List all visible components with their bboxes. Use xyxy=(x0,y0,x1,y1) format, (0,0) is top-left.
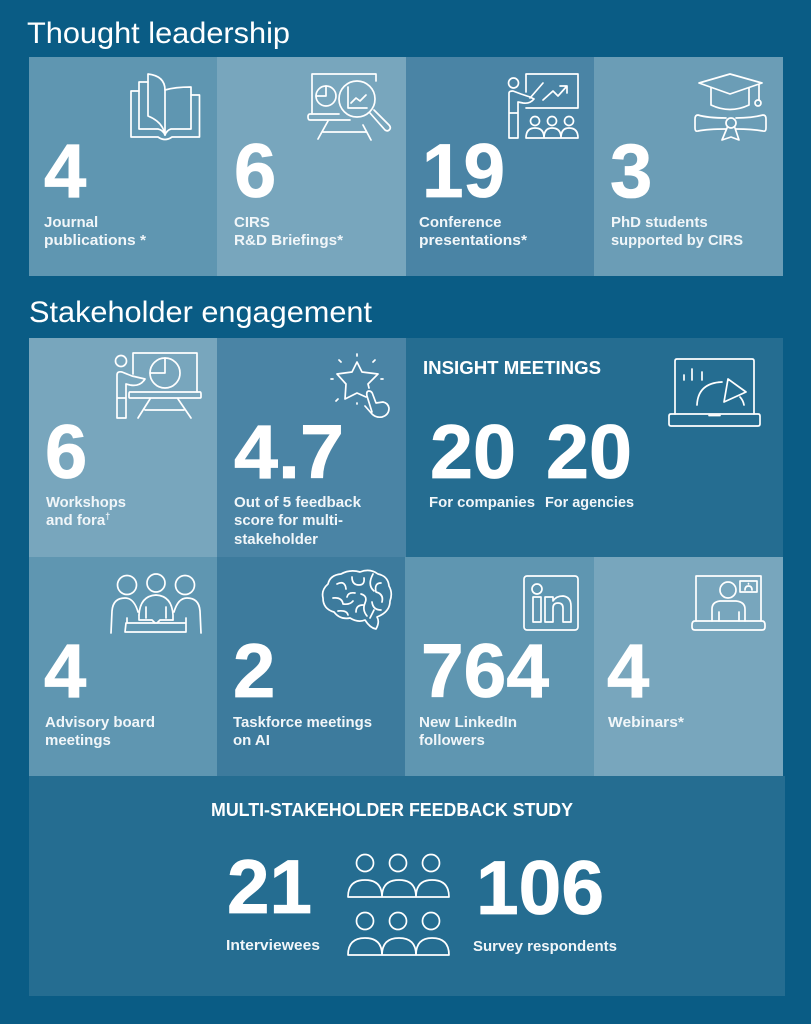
number: 6: 6 xyxy=(234,129,276,214)
panel: insight meetings xyxy=(406,338,783,557)
label: CIRS R&D briefings: CIRS xyxy=(234,214,270,231)
panel: CIRS R&D briefings xyxy=(217,57,406,276)
label: conference presentations: presentations* xyxy=(419,232,527,249)
label: workshops and fora: Workshops xyxy=(46,494,126,511)
number: 21: 21 xyxy=(227,845,312,930)
icon: graduation cap and diploma xyxy=(695,74,766,140)
number: 19: 19 xyxy=(422,129,505,214)
panel: workshops and fora xyxy=(29,338,217,557)
heading: insight meetings: INSIGHT MEETINGS xyxy=(423,358,601,378)
number: 106: 106 xyxy=(476,846,604,931)
number: 764: 764 xyxy=(421,629,549,714)
label: feedback score: stakeholder xyxy=(234,531,318,548)
icon: presenter with chart and audience xyxy=(508,74,578,138)
panel: conference presentations xyxy=(406,57,594,276)
label: PhD students: supported by CIRS xyxy=(611,232,743,249)
label: new LinkedIn followers: New LinkedIn xyxy=(419,714,517,731)
panel: PhD students xyxy=(594,57,783,276)
icon: LinkedIn logo xyxy=(524,576,578,630)
label: advisory board meetings: Advisory board xyxy=(45,714,155,731)
panel: multi-stakeholder feedback study xyxy=(29,776,785,996)
icon: laptop with video call xyxy=(692,576,765,630)
icon: two rows of people xyxy=(348,854,449,955)
panel: new LinkedIn followers xyxy=(405,557,594,776)
icon: open book xyxy=(131,74,200,140)
label: workshops and fora: † xyxy=(105,511,110,521)
panel: feedback score xyxy=(217,338,406,557)
label: journal publications: publications * xyxy=(44,232,146,249)
number: 4.7: 4.7 xyxy=(234,410,344,495)
icon: star with pointing hand xyxy=(331,354,389,417)
panel: taskforce meetings on AI xyxy=(217,557,405,776)
label: workshops and fora: and fora xyxy=(46,512,106,529)
number: 20 for companies: 20 xyxy=(430,410,516,495)
label: for agencies: For agencies xyxy=(545,494,634,511)
label: feedback score: score for multi- xyxy=(234,512,343,529)
number: 3: 3 xyxy=(610,129,652,214)
heading: Stakeholder engagement: Stakeholder engagement xyxy=(29,296,373,329)
icon: presenter with pie chart board xyxy=(116,353,201,418)
panel: journal publications xyxy=(29,57,217,276)
icon: brain xyxy=(323,570,391,629)
icon: laptop with gauge xyxy=(669,359,760,426)
number: 6: 6 xyxy=(45,410,87,495)
label: advisory board meetings: meetings xyxy=(45,732,111,749)
label: survey respondents: Survey respondents xyxy=(473,938,617,955)
number: 4: 4 xyxy=(44,629,86,714)
label: for companies: For companies xyxy=(429,494,535,511)
label: taskforce meetings on AI: on AI xyxy=(233,732,270,749)
label: feedback score: Out of 5 feedback xyxy=(234,494,362,511)
label: webinars: Webinars* xyxy=(608,714,684,731)
label: PhD students: PhD students xyxy=(611,214,708,231)
label: conference presentations: Conference xyxy=(419,214,502,231)
label: interviewees: Interviewees xyxy=(226,937,320,954)
panel: webinars xyxy=(594,557,783,776)
label: taskforce meetings on AI: Taskforce meetings xyxy=(233,714,372,731)
panel: advisory board meetings xyxy=(29,557,217,776)
number: 4: 4 xyxy=(44,129,86,214)
number: 20 for agencies: 20 xyxy=(546,410,632,495)
label: journal publications: Journal xyxy=(44,214,98,231)
number: 4: 4 xyxy=(607,629,649,714)
label: new LinkedIn followers: followers xyxy=(419,732,485,749)
label: CIRS R&D briefings: R&D Briefings* xyxy=(234,232,343,249)
heading: multi-stakeholder feedback study: MULTI-STAKEHOLDER FEEDBACK STUDY xyxy=(211,800,573,820)
number: 2: 2 xyxy=(233,629,275,714)
icon: people at a table xyxy=(111,574,201,633)
icon: presentation board with magnifier xyxy=(308,74,390,140)
heading: Thought leadership: Thought leadership xyxy=(27,17,290,50)
